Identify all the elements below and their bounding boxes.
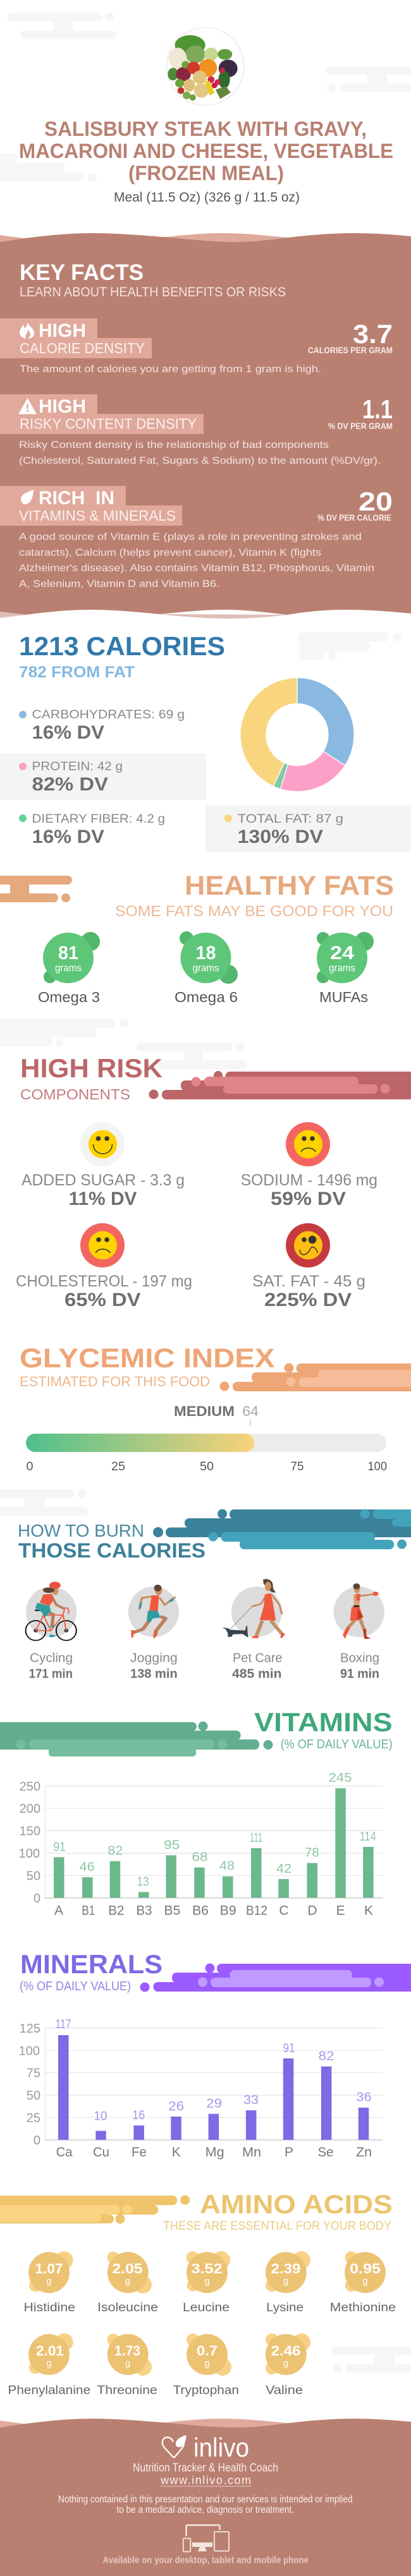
nutrient: protein (19, 760, 123, 795)
panel: key facts (0, 233, 411, 619)
icon: cyclist (26, 1581, 77, 1640)
bar chart: minerals: 26 (168, 2100, 184, 2113)
badge: omega 6: grams (192, 963, 219, 974)
fact: risky content density: HIGH (39, 396, 86, 417)
bar chart: vitamins: B6 (192, 1904, 209, 1918)
panel: how to burn those calories (18, 1509, 411, 1681)
risk item: added sugar: 11% DV (69, 1188, 137, 1209)
activity: boxing (334, 1583, 384, 1681)
amino acid: methionine: 0.95 (350, 2261, 381, 2277)
amino acid: methionine: g (362, 2276, 368, 2287)
badge: omega 3: grams (55, 963, 82, 974)
panel: vitamins (0, 1707, 393, 1918)
nutrient: dietary fiber: 16% DV (32, 826, 104, 847)
bar chart: minerals: 117 (56, 2017, 71, 2031)
amino acid: methionine (330, 2251, 396, 2314)
bar chart: vitamins: 150 (20, 1825, 40, 1839)
bar chart: vitamins: 13 (137, 1875, 149, 1889)
logo: inlivo (193, 2433, 249, 2462)
disclaimer: Nothing contained in this presentation and our services is intended or implied (58, 2494, 353, 2505)
bar chart: vitamins: B12 (246, 1904, 267, 1918)
fact: rich in vitamins and minerals: A, Selenium, Vitamin D and Vitamin B6. (19, 579, 219, 590)
bar chart: vitamins: B5 (164, 1904, 180, 1918)
risk item: added sugar (21, 1122, 185, 1209)
bar chart: minerals: P (285, 2145, 293, 2160)
amino acid: lysine: 2.39 (271, 2261, 301, 2277)
risk item: cholesterol (16, 1223, 192, 1310)
legend backgrounds (0, 753, 411, 852)
bar chart: vitamins: 111 (250, 1831, 262, 1845)
amino acid: tryptophan: g (204, 2358, 210, 2369)
bar chart: minerals: 75 (27, 2066, 40, 2080)
nutrient: total fat: TOTAL FAT: 87 g (238, 813, 343, 826)
amino acid: methionine: Methionine (330, 2301, 396, 2314)
bar chart: vitamins: 82 (107, 1844, 123, 1858)
icon: jogger (128, 1585, 179, 1638)
activity: jogging: Jogging (130, 1652, 178, 1666)
fact: rich in vitamins and minerals (0, 486, 393, 590)
bar chart: vitamins: 200 (20, 1802, 40, 1816)
risk item: saturated fat: SAT. FAT - 45 g (252, 1273, 365, 1290)
serving size subtitle: Meal (11.5 Oz) (326 g / 11.5 oz) (114, 190, 300, 205)
tagline: Nutrition Tracker & Health Coach (133, 2462, 278, 2474)
amino acid: phenylalanine: g (46, 2358, 52, 2369)
subheading: SOME FATS MAY BE GOOD FOR YOU (115, 903, 393, 920)
bar chart: minerals: K (172, 2145, 181, 2160)
gauge scale: 50 (200, 1460, 214, 1473)
badge: MUFAs (317, 932, 374, 1005)
disclaimer (58, 2494, 353, 2515)
decorative swoosh (153, 1509, 411, 1549)
gauge scale (27, 1460, 387, 1473)
amino acid: valine: g (283, 2358, 288, 2369)
amino acid: leucine (183, 2251, 230, 2314)
activity: cycling: Cycling (30, 1652, 73, 1666)
amino acid: isoleucine: Isoleucine (97, 2301, 158, 2314)
nutrient: protein: 82% DV (32, 774, 108, 795)
nutrient: carbohydrates: 16% DV (32, 722, 104, 743)
subheading: from fat: 782 FROM FAT (19, 663, 135, 681)
risk item: added sugar: ADDED SUGAR - 3.3 g (21, 1171, 185, 1189)
bar chart: vitamins: 78 (305, 1846, 319, 1860)
risk item: saturated fat: 225% DV (264, 1290, 352, 1310)
icon: devices (183, 2525, 229, 2551)
amino acid: isoleucine: 2.05 (113, 2261, 143, 2277)
amino acid: threonine: Threonine (97, 2384, 157, 2397)
subheading: (% OF DAILY VALUE) (281, 1738, 393, 1751)
heading: those calories: THOSE CALORIES (18, 1539, 206, 1562)
amino acid: phenylalanine: 2.01 (36, 2343, 64, 2359)
bar chart: vitamins: D (307, 1904, 317, 1918)
badge: omega 6 (175, 931, 238, 1005)
panel: calories (0, 631, 411, 852)
amino acid: valine: 2.46 (271, 2343, 301, 2359)
heading: how to burn: HOW TO BURN (18, 1521, 144, 1540)
key facts subheading: LEARN ABOUT HEALTH BENEFITS OR RISKS (20, 285, 286, 299)
title: SALISBURY STEAK WITH GRAVY, (44, 118, 367, 140)
bar chart: vitamins: 50 (27, 1869, 40, 1883)
bar chart: vitamins: 42 (276, 1862, 291, 1876)
decorative swoosh (0, 2195, 190, 2224)
amino acid: histidine: g (46, 2276, 52, 2287)
decorative swoosh (149, 1071, 411, 1099)
subheading: ESTIMATED FOR THIS FOOD (20, 1374, 210, 1389)
subheading: components: COMPONENTS (20, 1086, 130, 1103)
bar chart: vitamins: 46 (80, 1860, 95, 1874)
amino acid: phenylalanine (8, 2333, 90, 2397)
bar chart: vitamins: 100 (19, 1847, 40, 1861)
subheading: (% OF DAILY VALUE) (20, 1980, 131, 1993)
bar chart: vitamins: 95 (164, 1838, 180, 1852)
fact: rich in vitamins and minerals: RICH IN (39, 488, 114, 509)
gauge scale: 100 (368, 1460, 387, 1473)
gauge bar (26, 1434, 386, 1452)
bar chart: vitamins: 245 (329, 1771, 352, 1785)
amino acid: tryptophan: Tryptophan (173, 2384, 239, 2397)
fact: risky content density (0, 394, 393, 466)
nutrient: dietary fiber (19, 813, 165, 847)
panel: minerals (19, 1949, 411, 2160)
fact: calorie density: CALORIES PER GRAM (308, 345, 393, 355)
donut chart (240, 678, 354, 792)
bar chart: minerals: 0 (34, 2134, 40, 2148)
icon: woman walking dog (222, 1579, 285, 1638)
gauge value label: 64 (242, 1403, 259, 1419)
heading: healthy fats: HEALTHY FATS (185, 871, 394, 901)
fact: risky content density: % DV PER GRAM (328, 421, 393, 431)
bar chart: vitamins: B2 (108, 1904, 124, 1918)
availability note: Available on your desktop, tablet and mobile phone (102, 2555, 309, 2566)
icon: warning triangle (19, 399, 36, 414)
bar chart: vitamins: E (336, 1904, 345, 1918)
heading: vitamins: VITAMINS (254, 1707, 393, 1737)
activity: cycling (26, 1581, 77, 1681)
panel: glycemic index (20, 1343, 411, 1473)
panel: healthy fats (0, 871, 394, 1005)
bar chart: minerals: 125 (20, 2022, 40, 2036)
heading: amino acids: AMINO ACIDS (200, 2189, 393, 2219)
bar chart: minerals: Fe (132, 2145, 147, 2160)
fact: rich in vitamins and minerals: % DV PER CALORIE (317, 512, 391, 523)
amino acid: lysine (266, 2251, 310, 2314)
heading: calories: 1213 CALORIES (19, 631, 225, 661)
bar chart: minerals: 91 (283, 2041, 295, 2055)
risk item: sodium: 59% DV (271, 1188, 346, 1209)
bar chart: minerals: 29 (206, 2097, 222, 2111)
gauge tick (250, 1420, 251, 1426)
nutrient: protein: PROTEIN: 42 g (32, 760, 123, 773)
amino acid: tryptophan: 0.7 (197, 2343, 218, 2359)
bar chart: vitamins: A (54, 1904, 63, 1918)
risk item: cholesterol: CHOLESTEROL - 197 mg (16, 1273, 192, 1290)
nutrient: total fat (224, 813, 343, 847)
bar chart: vitamins: B3 (137, 1904, 152, 1918)
amino acid: valine: Valine (266, 2384, 303, 2397)
badge: omega 6: Omega 6 (175, 989, 238, 1005)
bar chart: minerals: Mn (242, 2145, 261, 2160)
bar chart: vitamins: B9 (220, 1904, 236, 1918)
website link: www.inlivo.com (160, 2474, 251, 2487)
amino acid: leucine: 3.52 (191, 2261, 223, 2277)
fact: calorie density: HIGH (39, 320, 86, 341)
fact: rich in vitamins and minerals: cataracts), Calcium (helps prevent cancer), Vitamin K (fights (19, 547, 321, 559)
nutrient: dietary fiber: DIETARY FIBER: 4.2 g (32, 813, 165, 826)
nutrient: total fat: 130% DV (238, 826, 323, 847)
title: MACARONI AND CHEESE, VEGETABLE (19, 140, 393, 162)
amino acid: histidine: Histidine (24, 2301, 75, 2314)
bar chart: vitamins: C (279, 1904, 289, 1918)
heading: minerals: MINERALS (20, 1949, 163, 1979)
subheading: THESE ARE ESSENTIAL FOR YOUR BODY (163, 2220, 391, 2233)
amino acid: threonine (97, 2334, 157, 2397)
bar chart: minerals: 50 (27, 2089, 40, 2103)
badge: omega 3 (38, 932, 100, 1005)
risk item: sodium: SODIUM - 1496 mg (241, 1171, 377, 1189)
decorative swoosh (220, 1364, 411, 1391)
amino acid: tryptophan (173, 2333, 239, 2397)
bar chart: vitamins: 0 (34, 1892, 40, 1906)
bar chart: minerals: 25 (27, 2112, 40, 2126)
activity: pet care (222, 1579, 285, 1681)
amino acid: threonine: 1.73 (114, 2343, 140, 2359)
heading: high risk: HIGH RISK (20, 1053, 163, 1083)
amino acid: valine (266, 2333, 310, 2397)
fact: risky content density: (Cholesterol, Saturated Fat, Sugars & Sodium) to the amount (%DV/gr). (19, 456, 381, 466)
fact: risky content density: 1.1 (362, 394, 393, 424)
bar chart: vitamins: 48 (219, 1859, 235, 1873)
gauge value label (174, 1403, 259, 1419)
bar chart: minerals: 10 (94, 2109, 107, 2123)
panel: footer (0, 2419, 411, 2576)
bar chart: minerals: Ca (56, 2145, 73, 2160)
fact: risky content density: RISKY CONTENT DENSITY (20, 416, 197, 432)
panel: high risk components (16, 1053, 411, 1310)
activity: boxing: 91 min (340, 1667, 379, 1681)
gauge scale: 75 (291, 1460, 304, 1473)
bar chart: minerals: Zn (356, 2145, 372, 2160)
activity: boxing: Boxing (340, 1652, 379, 1666)
risk item: saturated fat (252, 1223, 365, 1310)
title: (FROZEN MEAL) (128, 162, 284, 184)
bar chart: minerals (19, 2017, 383, 2160)
fact: rich in vitamins and minerals: A good source of Vitamin E (plays a role in preventing strokes and (19, 532, 362, 542)
bar chart: vitamins: K (364, 1904, 373, 1918)
amino acid: lysine: Lysine (266, 2301, 304, 2314)
decorative swoosh (0, 876, 72, 902)
panel: amino acids (0, 2189, 396, 2397)
bar chart: minerals: 33 (243, 2093, 259, 2107)
amino acid: isoleucine (97, 2252, 158, 2314)
icon: leaf (21, 490, 34, 504)
bar chart: vitamins: 250 (20, 1780, 40, 1794)
badge: omega 3: Omega 3 (38, 989, 100, 1005)
bar chart: vitamins (19, 1771, 383, 1918)
fact: calorie density: 3.7 (353, 319, 393, 349)
amino acid: phenylalanine: Phenylalanine (8, 2384, 90, 2397)
activity: cycling: 171 min (29, 1667, 73, 1681)
fact: rich in vitamins and minerals: 20 (359, 487, 393, 516)
gauge scale: 25 (111, 1460, 125, 1473)
icon: heart with leaf (163, 2436, 186, 2458)
activity: jogging: 138 min (130, 1667, 178, 1681)
title (19, 118, 393, 184)
amino acid: lysine: g (283, 2276, 288, 2287)
amino acid: histidine: 1.07 (35, 2261, 63, 2277)
bar chart: minerals: 16 (132, 2108, 145, 2122)
badge: MUFAs: grams (329, 963, 355, 974)
key facts heading: KEY FACTS (20, 260, 144, 285)
activity: jogging (128, 1585, 179, 1681)
icon: food photo of vegetables (167, 27, 244, 106)
nutrient: carbohydrates: CARBOHYDRATES: 69 g (32, 708, 185, 722)
fact: risky content density: Risky Content density is the relationship of bad components (19, 440, 329, 450)
amino acid: leucine: g (204, 2276, 210, 2287)
fact: calorie density: CALORIE DENSITY (20, 340, 145, 356)
logo (163, 2433, 249, 2462)
badge: omega 3: 81 (58, 943, 78, 964)
icon: flame (20, 322, 34, 339)
disclaimer: to be a medical advice, diagnosis or treatment. (116, 2505, 294, 2515)
fact: rich in vitamins and minerals: VITAMINS & MINERALS (19, 507, 176, 524)
nutrient: carbohydrates (19, 708, 185, 743)
bar chart: minerals: Cu (93, 2145, 109, 2160)
badge: omega 6: 18 (196, 943, 216, 964)
bar chart: vitamins: B1 (82, 1904, 95, 1918)
decorative swoosh (140, 1964, 411, 1992)
badge: MUFAs: 24 (330, 943, 354, 964)
fact: calorie density (0, 318, 393, 375)
activity: pet care: Pet Care (233, 1652, 282, 1666)
bar chart: minerals: 100 (19, 2045, 40, 2059)
bar chart: vitamins: 68 (192, 1851, 207, 1865)
gauge value label: MEDIUM (174, 1403, 235, 1419)
amino acid: histidine (24, 2251, 75, 2314)
amino acid: isoleucine: g (125, 2276, 130, 2287)
bar chart: minerals: Mg (206, 2145, 224, 2160)
risk item: cholesterol: 65% DV (64, 1290, 141, 1310)
fact: calorie density: The amount of calories you are getting from 1 gram is high. (20, 364, 321, 375)
risk item: sodium (241, 1122, 377, 1209)
gauge scale: 0 (27, 1460, 33, 1473)
icon: boxer (334, 1583, 384, 1639)
bar chart: vitamins: 91 (53, 1840, 66, 1854)
bar chart: minerals: 82 (319, 2050, 334, 2064)
bar chart: vitamins: 114 (360, 1830, 376, 1844)
decorative swoosh (0, 1721, 273, 1757)
amino acid: threonine: g (125, 2358, 130, 2369)
bar chart: minerals: Se (317, 2145, 334, 2160)
activity: pet care: 485 min (232, 1667, 282, 1681)
amino acid: leucine: Leucine (183, 2301, 230, 2314)
fact: rich in vitamins and minerals: Alzheimer's disease). Also contains Vitamin B12, Phosphorus, Vitamin (19, 563, 374, 574)
badge: MUFAs: MUFAs (319, 989, 368, 1005)
heading: glycemic index: GLYCEMIC INDEX (20, 1343, 275, 1374)
bar chart: minerals: 36 (357, 2091, 372, 2105)
